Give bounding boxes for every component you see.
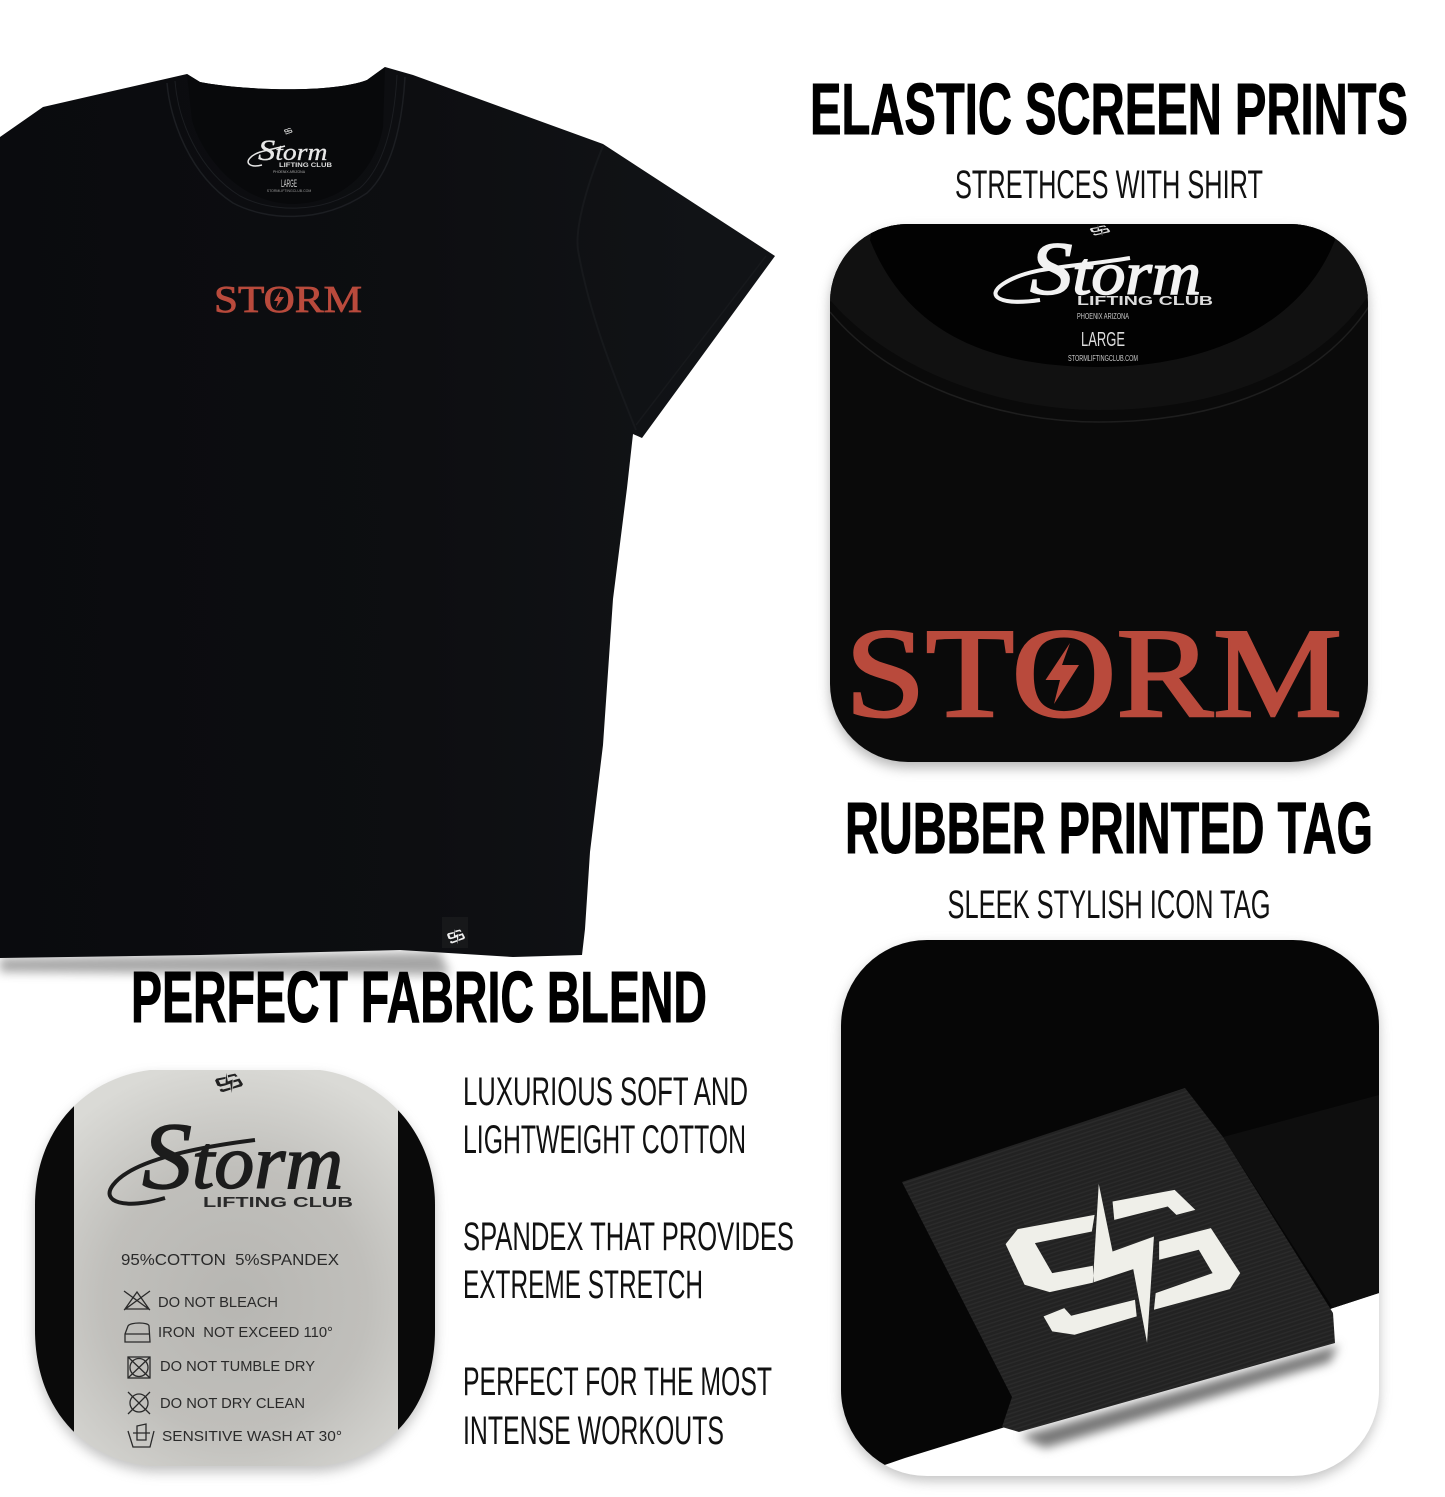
collar logo: LARGE (1081, 329, 1125, 351)
icon: label top logo (215, 1073, 243, 1093)
collar logo: Storm (1030, 229, 1201, 311)
text block: spandex: SPANDEX THAT PROVIDES (463, 1215, 794, 1259)
text block: workouts: INTENSE WORKOUTS (463, 1409, 724, 1453)
collar (167, 67, 766, 430)
neck label: storm logo: Storm (258, 133, 327, 166)
care instructions: IRON NOT EXCEED 110° (158, 1325, 333, 1341)
icon: collar logo (1090, 225, 1110, 236)
collar logo: LIFTING CLUB (1077, 293, 1213, 308)
heading: perfect fabric blend: PERFECT FABRIC BLEND (131, 958, 707, 1038)
collar logo (993, 243, 1212, 361)
care instructions: DO NOT DRY CLEAN (160, 1396, 305, 1412)
subheading: sleek stylish icon tag: SLEEK STYLISH ICON TAG (948, 883, 1270, 927)
woven tag (902, 1088, 1335, 1432)
neck label: storm logo (248, 133, 332, 193)
panel: screen print close-up (830, 224, 1370, 768)
icon: neck logo (284, 128, 292, 135)
hem tag icon (442, 917, 468, 948)
label logo: Storm (142, 1104, 343, 1209)
care instructions (124, 1291, 342, 1447)
panel: fabric care label (35, 1070, 435, 1472)
collar logo: STORMLIFTINGCLUB.COM (1068, 354, 1138, 363)
label logo: LIFTING CLUB (203, 1194, 353, 1211)
large STORM print: STORM (845, 602, 1342, 744)
neck label: storm logo: PHOENIX ARIZONA (273, 170, 306, 174)
care instructions: DO NOT TUMBLE DRY (160, 1359, 315, 1375)
care instructions: SENSITIVE WASH AT 30° (162, 1429, 342, 1445)
neck label: storm logo: LIFTING CLUB (279, 162, 332, 169)
text block: workouts (463, 1360, 772, 1453)
care instructions: DO NOT BLEACH (158, 1295, 278, 1311)
text block: soft cotton: LIGHTWEIGHT COTTON (463, 1118, 746, 1162)
large STORM print (853, 630, 1340, 718)
text block: spandex (463, 1215, 794, 1307)
text block: workouts: PERFECT FOR THE MOST (463, 1360, 772, 1404)
text block: spandex: EXTREME STRETCH (463, 1263, 703, 1307)
panel: rubber tag close-up (841, 940, 1379, 1481)
text block: soft cotton: LUXURIOUS SOFT AND (463, 1070, 748, 1114)
shirt print: STORM: STORM (214, 279, 362, 321)
neck label: storm logo: STORMLIFTINGCLUB.COM (267, 189, 311, 193)
collar logo: PHOENIX ARIZONA (1077, 312, 1129, 321)
t-shirt photo (0, 67, 775, 975)
composition: 95%COTTON 5%SPANDEX (121, 1252, 339, 1269)
subheading: stretches with shirt: STRETHCES WITH SHIRT (955, 163, 1263, 207)
text block: soft cotton (463, 1070, 748, 1162)
label logo (108, 1124, 352, 1207)
neck label: storm logo: LARGE (281, 178, 297, 190)
icon: tag logo (1006, 1184, 1240, 1343)
